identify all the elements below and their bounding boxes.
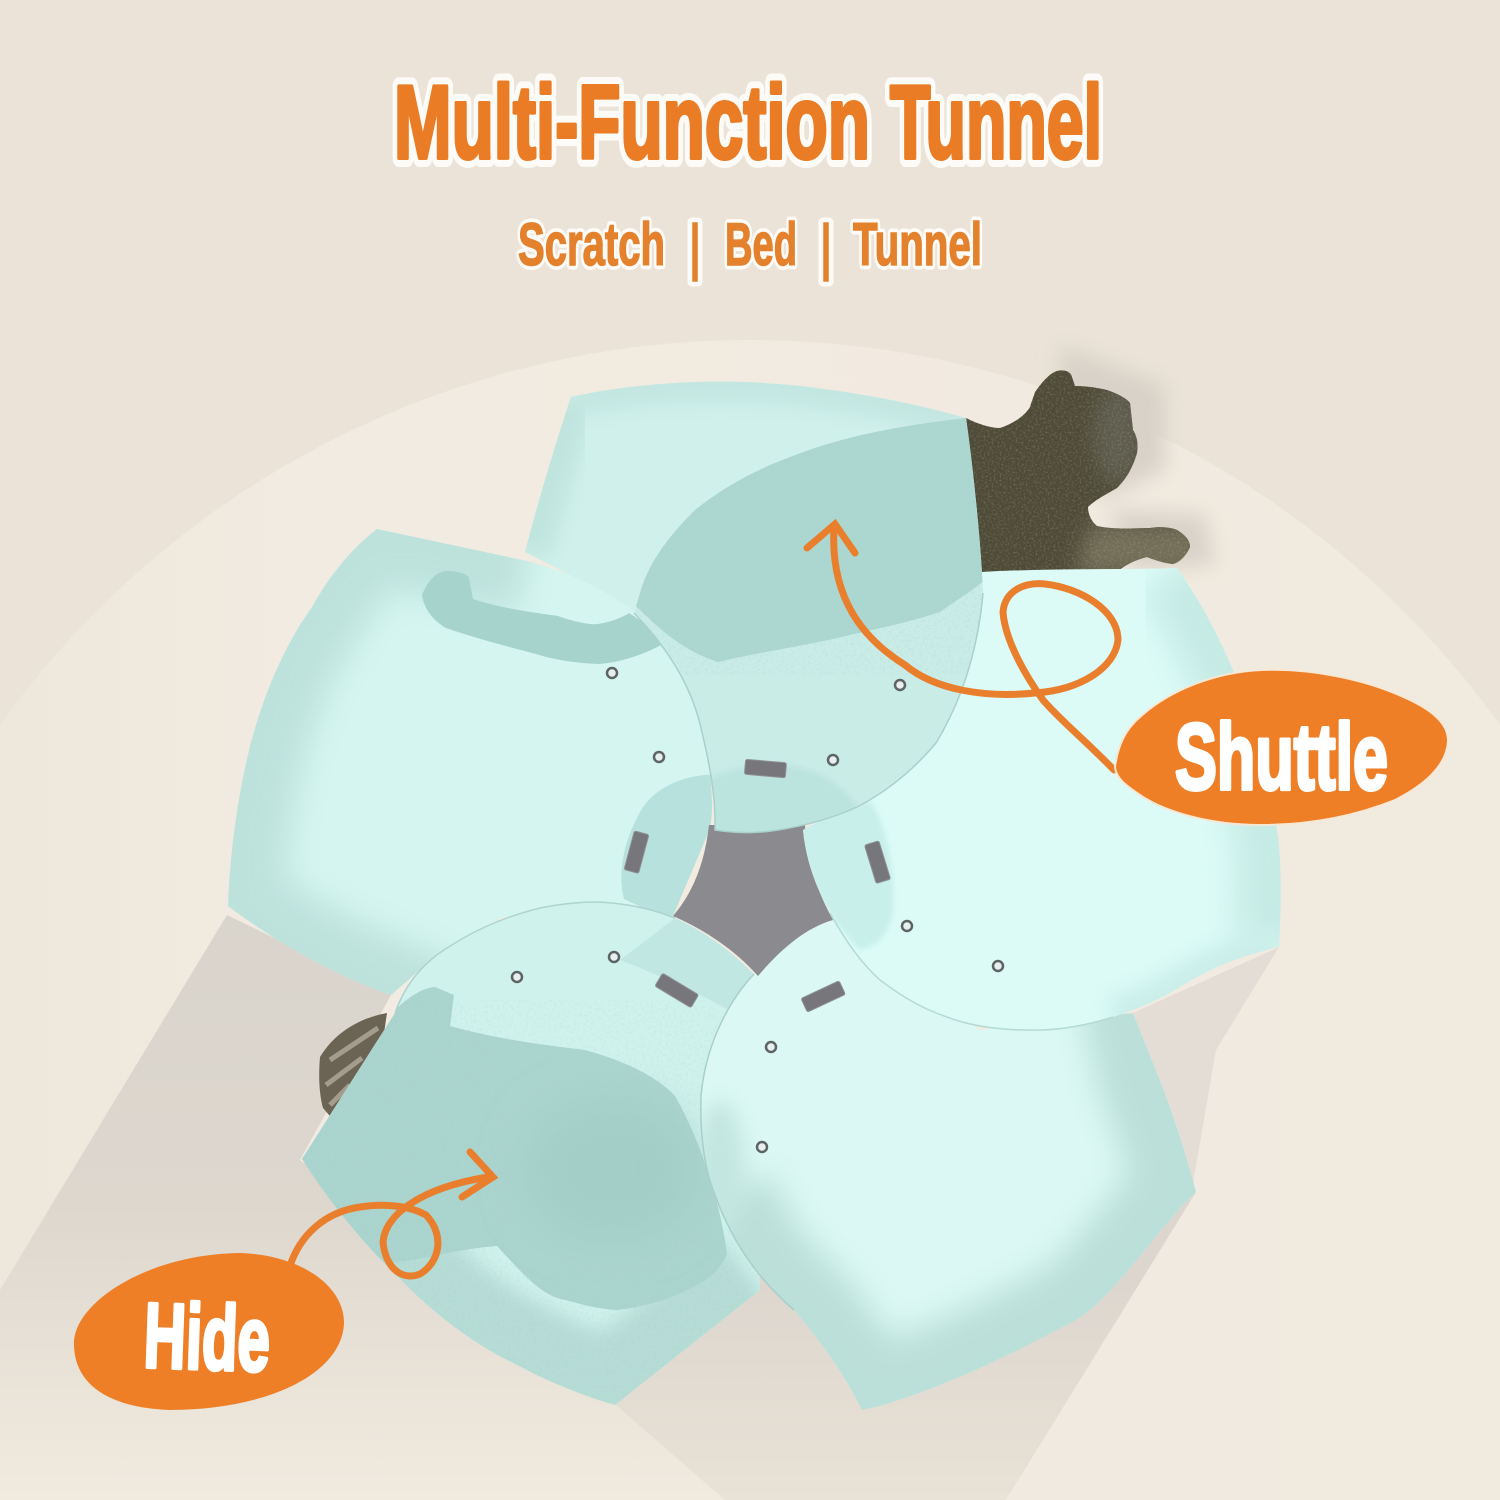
- shadow: bottom centre: [610, 1192, 1196, 1500]
- shadow: lower left: [0, 915, 577, 1396]
- shadow: right side: [1133, 947, 1279, 1200]
- subtitle: Tunnel: [853, 211, 982, 278]
- title: Tunnel: [890, 65, 1102, 181]
- subtitle: Bed: [725, 211, 797, 278]
- ring section: [712, 766, 856, 832]
- subtitle: Tunnel: [853, 211, 982, 278]
- subtitle: Scratch: [518, 211, 665, 278]
- title: Tunnel: [890, 65, 1102, 181]
- arrow: shuttle path: [807, 524, 1118, 770]
- petal: top front disc: [634, 418, 984, 834]
- subtitle: [518, 211, 982, 282]
- cat cast shadow: [1060, 345, 1215, 570]
- cat silhouette: top cat shadow: [636, 418, 982, 662]
- title: Multi-Function: [394, 65, 870, 181]
- subtitle: Scratch: [518, 211, 665, 278]
- rivets: [512, 668, 1003, 1152]
- callout: Hide: [74, 1253, 344, 1410]
- background: [0, 340, 1209, 1396]
- callout: Shuttle: [1115, 670, 1448, 825]
- cat silhouette: hiding cat shadow: [280, 987, 727, 1310]
- ring section: [622, 774, 712, 916]
- petal: top back: [525, 382, 966, 611]
- title: Multi-Function: [394, 65, 870, 181]
- arrow: hide path: [290, 1152, 493, 1276]
- cat silhouette: tail shadow: [422, 571, 670, 664]
- petal: bottom left: [280, 902, 760, 1405]
- outer rim shading: [324, 1192, 760, 1405]
- petal: right: [795, 568, 1281, 1030]
- ring section: [620, 918, 754, 1009]
- magnets: [624, 759, 891, 1012]
- ring section: [795, 800, 893, 950]
- central grey opening: [673, 825, 833, 976]
- cat: bottom left, hiding: [319, 1013, 387, 1122]
- petal: bottom right: [695, 920, 1196, 1410]
- callout: Shuttle: Shuttle: [1175, 704, 1388, 809]
- petal: left: [228, 529, 725, 1030]
- cat: top, emerging from tunnel: [966, 370, 1190, 572]
- subtitle: Bed: [725, 211, 797, 278]
- callout: Hide: Hide: [142, 1285, 272, 1391]
